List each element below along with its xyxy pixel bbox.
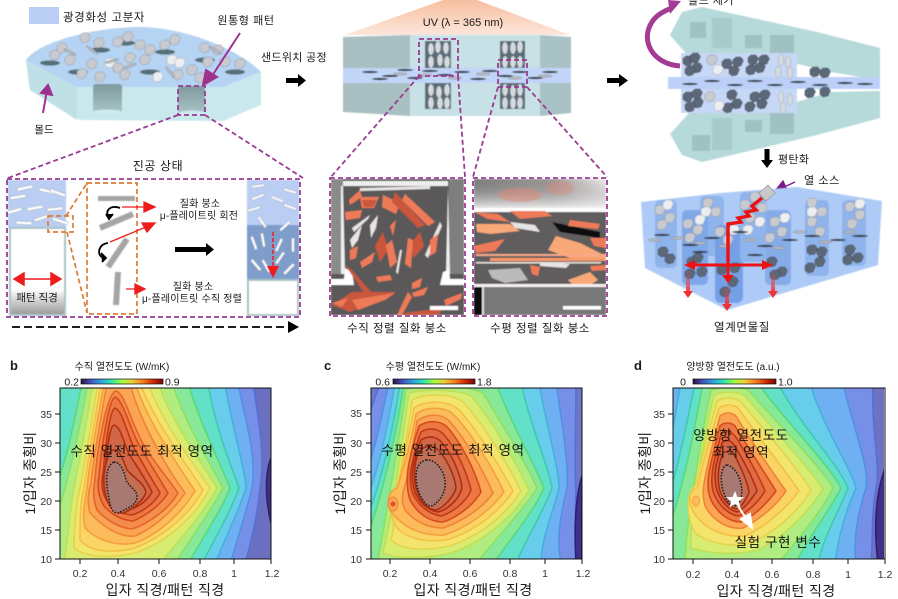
colorbar b bbox=[64, 361, 180, 388]
colorbar d bbox=[680, 361, 793, 388]
arrow: step 2 bbox=[607, 74, 628, 87]
heatmap d bbox=[668, 383, 885, 564]
axes b: 0.2 bbox=[73, 568, 87, 580]
annotation d: 최적 영역 bbox=[713, 445, 769, 460]
label: rotation bbox=[160, 198, 238, 222]
axes c: 0.6 bbox=[463, 568, 477, 580]
axes d: 10 bbox=[653, 554, 665, 566]
axes c: 1/입자 종횡비 bbox=[332, 431, 348, 515]
heat source and heat flow bbox=[684, 185, 775, 283]
zoom box on pattern bbox=[8, 86, 303, 178]
axes b: 1/입자 종횡비 bbox=[22, 431, 38, 515]
colorbar c: 1.8 bbox=[477, 376, 492, 388]
legend: photocurable polymer: 광경화성 고분자 bbox=[63, 10, 145, 24]
axes b bbox=[22, 409, 279, 598]
label: thermal interface material: 열계면물질 bbox=[714, 321, 770, 334]
caption: horizontal: 수평 정렬 질화 붕소 bbox=[490, 322, 590, 335]
axes c: 0.8 bbox=[503, 568, 517, 580]
axes c: 15 bbox=[350, 525, 362, 537]
colorbar c: 0.6 bbox=[375, 376, 390, 388]
red arrows bbox=[110, 202, 155, 294]
axes d: 1.2 bbox=[878, 569, 892, 581]
annotation d bbox=[693, 428, 789, 460]
label: experimental parameter: 실험 구현 변수 bbox=[735, 535, 821, 550]
arrow: mold removal bbox=[647, 0, 681, 66]
rotation arrows bbox=[99, 207, 120, 262]
legend: photocurable polymer bbox=[29, 7, 145, 24]
label: vertical alignment bbox=[142, 281, 242, 305]
axes c: 1 bbox=[542, 568, 548, 580]
caption: vertical: 수직 정렬 질화 붕소 bbox=[347, 322, 447, 335]
axes c: 1.2 bbox=[576, 568, 590, 580]
left pattern well bbox=[6, 180, 68, 315]
heatmap c bbox=[366, 383, 582, 564]
mold removal illustration bbox=[668, 7, 880, 162]
axes b: 1.2 bbox=[265, 568, 279, 580]
axes c: 10 bbox=[350, 554, 362, 566]
axes b: 15 bbox=[40, 525, 52, 537]
fading heat arrows bbox=[683, 272, 778, 311]
arrow: heat source bbox=[775, 181, 795, 191]
axes d bbox=[637, 409, 892, 599]
axes d: 0.6 bbox=[765, 569, 779, 581]
label: heat source: 열 소스 bbox=[804, 174, 840, 187]
axes b: 입자 직경/패턴 직경 bbox=[105, 582, 225, 598]
arrow: cylindrical pattern bbox=[203, 33, 240, 85]
axes d: 15 bbox=[653, 525, 665, 537]
axes d: 20 bbox=[653, 496, 665, 508]
axes b: 30 bbox=[40, 438, 52, 450]
arrow: step 1 bbox=[286, 74, 306, 87]
arrow: mold bbox=[41, 85, 52, 113]
arrow: planarization bbox=[761, 149, 773, 168]
annotation d: 양방향 열전도도 bbox=[693, 428, 789, 443]
thermal interface material block bbox=[641, 187, 882, 310]
panel d heading: d bbox=[634, 358, 642, 373]
colorbar b: 0.2 bbox=[64, 376, 79, 388]
arrow: experimental parameter bbox=[738, 506, 752, 528]
axes d: 0.4 bbox=[725, 569, 739, 581]
axes b: 35 bbox=[40, 409, 52, 421]
axes d: 0.8 bbox=[806, 569, 820, 581]
colorbar b: 0.9 bbox=[165, 376, 180, 388]
axes b: 10 bbox=[40, 554, 52, 566]
axes c: 30 bbox=[350, 438, 362, 450]
colorbar c bbox=[375, 361, 492, 388]
axes c: 0.2 bbox=[383, 568, 397, 580]
sandwich structure bbox=[343, 35, 571, 116]
label: cylindrical pattern: 원통형 패턴 bbox=[217, 14, 275, 27]
axes d: 1/입자 종횡비 bbox=[637, 431, 653, 515]
label: rotation: 질화 붕소 bbox=[180, 198, 220, 210]
heatmap b bbox=[55, 383, 271, 564]
SEM image: horizontally aligned boron nitride bbox=[473, 178, 607, 316]
arrow: process direction bbox=[12, 321, 299, 333]
zoom boxes on sandwich bbox=[330, 39, 607, 178]
axes c: 20 bbox=[350, 496, 362, 508]
panel: vacuum infiltration bbox=[6, 179, 300, 317]
axes b: 0.4 bbox=[111, 568, 125, 580]
colorbar c: 수평 열전도도 (W/mK) bbox=[386, 361, 480, 373]
annotation c: 수평 열전도도 최적 영역 bbox=[381, 443, 525, 458]
axes c: 입자 직경/패턴 직경 bbox=[413, 582, 533, 598]
platelets bbox=[98, 198, 135, 305]
axes b: 0.6 bbox=[152, 568, 166, 580]
UV light bbox=[345, 0, 570, 35]
UV light: UV (λ = 365 nm) bbox=[423, 17, 503, 29]
axes b: 1 bbox=[231, 568, 237, 580]
axes c bbox=[332, 408, 590, 598]
mold with cylindrical patterns bbox=[26, 27, 261, 121]
label: planarization: 평탄화 bbox=[778, 153, 809, 166]
arrow: pattern diameter bbox=[14, 273, 61, 285]
axes d: 입자 직경/패턴 직경 bbox=[716, 583, 836, 599]
axes b: 25 bbox=[40, 467, 52, 479]
star: experimental parameter bbox=[726, 491, 744, 508]
label: vertical alignment: 질화 붕소 bbox=[173, 281, 213, 293]
colorbar d: 1.0 bbox=[778, 376, 793, 388]
annotation b: 수직 열전도도 최적 영역 bbox=[70, 444, 214, 459]
label: vertical alignment: μ-플레이트릿 수직 정렬 bbox=[142, 292, 242, 305]
label: vacuum state: 진공 상태 bbox=[133, 159, 183, 173]
right filled well bbox=[247, 180, 299, 315]
axes b: 0.8 bbox=[193, 568, 207, 580]
panel b heading: b bbox=[10, 358, 18, 373]
axes c: 25 bbox=[350, 467, 362, 479]
axes d: 0.2 bbox=[686, 569, 700, 581]
axes c: 0.4 bbox=[423, 568, 437, 580]
colorbar b: 수직 열전도도 (W/mK) bbox=[75, 361, 169, 373]
arrow: infiltration bbox=[175, 243, 214, 256]
label: rotation: μ-플레이트릿 회전 bbox=[160, 210, 238, 222]
magnified orange box bbox=[48, 183, 137, 314]
arrow: resin flow bbox=[272, 232, 274, 266]
colorbar d: 양방향 열전도도 (a.u.) bbox=[686, 361, 780, 373]
axes d: 30 bbox=[653, 438, 665, 450]
SEM image: vertically aligned boron nitride bbox=[330, 178, 465, 316]
label: mold: 몰드 bbox=[34, 124, 54, 136]
axes d: 25 bbox=[653, 467, 665, 479]
axes d: 35 bbox=[653, 409, 665, 421]
label: pattern diameter: 패턴 직경 bbox=[16, 291, 58, 304]
axes d: 1 bbox=[845, 569, 851, 581]
panel c heading: c bbox=[324, 358, 331, 373]
axes c: 35 bbox=[350, 408, 362, 420]
label: sandwich process: 샌드위치 공정 bbox=[261, 51, 327, 64]
colorbar d: 0 bbox=[680, 376, 686, 388]
axes b: 20 bbox=[40, 496, 52, 508]
